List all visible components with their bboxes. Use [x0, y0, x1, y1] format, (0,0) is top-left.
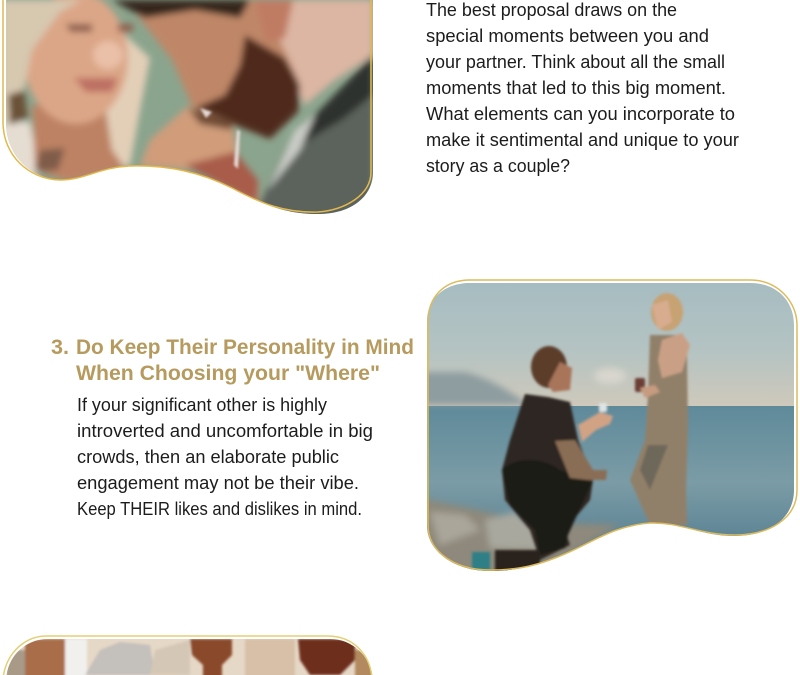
body text: tip 3 paragraph: crowds, then an elaborate public [77, 447, 339, 467]
heading: tip 3: When Choosing your "Where" [76, 361, 380, 385]
body text: tip 2 paragraph [426, 0, 739, 176]
heading: tip 3: 3. [51, 335, 69, 359]
body text: tip 3 paragraph [77, 395, 373, 519]
body text: tip 2 paragraph: special moments between you and [426, 26, 709, 46]
body text: tip 2 paragraph: your partner. Think about all the small [426, 52, 725, 72]
body text: tip 3 paragraph: Keep THEIR likes and dislikes in mind. [77, 499, 362, 519]
body text: tip 3 paragraph: introverted and uncomfortable in big [77, 421, 373, 441]
heading: tip 3 [51, 335, 414, 385]
heading: tip 3: Do Keep Their Personality in Mind [76, 335, 414, 359]
body text: tip 2 paragraph: The best proposal draws on the [426, 0, 677, 20]
body text: tip 3 paragraph: If your significant other is highly [77, 395, 327, 415]
body text: tip 2 paragraph: What elements can you incorporate to [426, 104, 735, 124]
body text: tip 2 paragraph: story as a couple? [426, 156, 570, 176]
body text: tip 3 paragraph: engagement may not be their vibe. [77, 473, 359, 493]
photo: ornate palace archway, top of next tip [0, 636, 380, 675]
photo: couple, man kissing woman's hand [0, 0, 380, 220]
body text: tip 2 paragraph: moments that led to this big moment. [426, 78, 726, 98]
gold outline: photo 1 [3, 0, 371, 212]
photo: beach proposal, man kneeling with ring [420, 280, 800, 580]
body text: tip 2 paragraph: make it sentimental and unique to your [426, 130, 739, 150]
gold outline: photo 2 [428, 280, 797, 570]
gold outline: photo 3 [3, 636, 372, 675]
